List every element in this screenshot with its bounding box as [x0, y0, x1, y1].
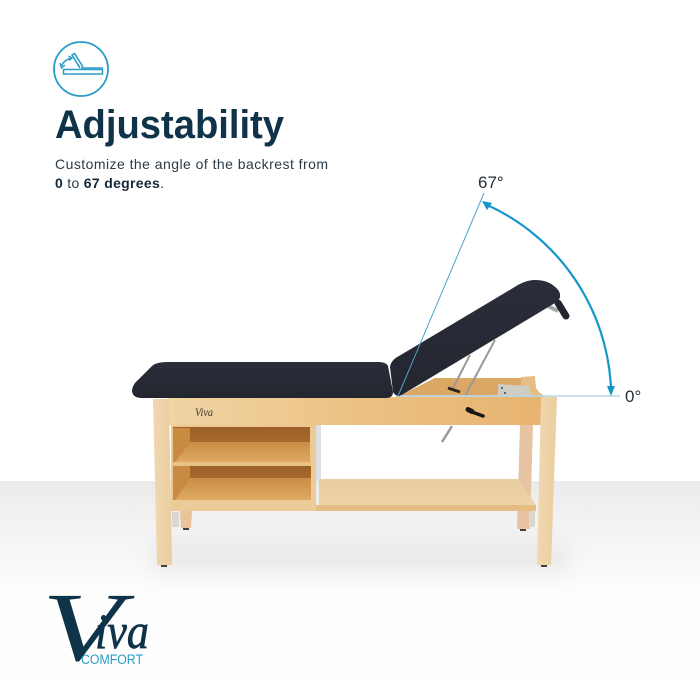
67 degree reference line: [398, 193, 484, 396]
apron top edge: [396, 395, 542, 397]
back left leg: [180, 511, 192, 528]
seat cushion: [132, 362, 393, 398]
lower shelf: [319, 479, 536, 511]
left front leg: [153, 399, 172, 565]
open compartment interior: [399, 378, 545, 397]
label 67 degrees: 67°: [478, 173, 504, 192]
title: Adjustability: [55, 103, 285, 147]
apron logo: Viva: [195, 405, 213, 419]
icon: adjustable table: [54, 42, 108, 96]
description text: [55, 156, 328, 191]
arrowhead bottom: [607, 386, 615, 396]
feet: [161, 528, 547, 567]
cabinet: [171, 425, 316, 511]
label 0 degrees: 0°: [625, 387, 641, 406]
0 degree reference line: [400, 395, 620, 397]
angle diagram: [398, 193, 620, 396]
lower shelf front edge: [316, 505, 536, 511]
backrest cushion: [390, 280, 560, 396]
logo: COMFORT: [81, 652, 143, 667]
cabinet grey side: [316, 425, 321, 481]
massage table: [132, 280, 566, 567]
right front leg: [537, 397, 557, 565]
metal hinge plate: [498, 384, 531, 396]
description text: 0 to 67 degrees.: [55, 175, 164, 191]
corner brackets: [172, 511, 535, 527]
adjustment knob: [468, 410, 483, 416]
description text: Customize the angle of the backrest from: [55, 156, 328, 172]
compartment post: [521, 376, 543, 397]
back right leg: [517, 424, 533, 529]
logo: iva: [95, 603, 149, 659]
arrowhead top: [482, 201, 492, 210]
rod clamp: [448, 388, 460, 392]
floor background: [0, 481, 700, 700]
apron: [168, 397, 541, 425]
logo: V: [42, 574, 136, 682]
support rods: [442, 340, 495, 442]
backrest handle: [548, 303, 566, 316]
floor shadow: [150, 512, 570, 580]
logo: [42, 574, 149, 682]
angle arc: [485, 204, 611, 388]
